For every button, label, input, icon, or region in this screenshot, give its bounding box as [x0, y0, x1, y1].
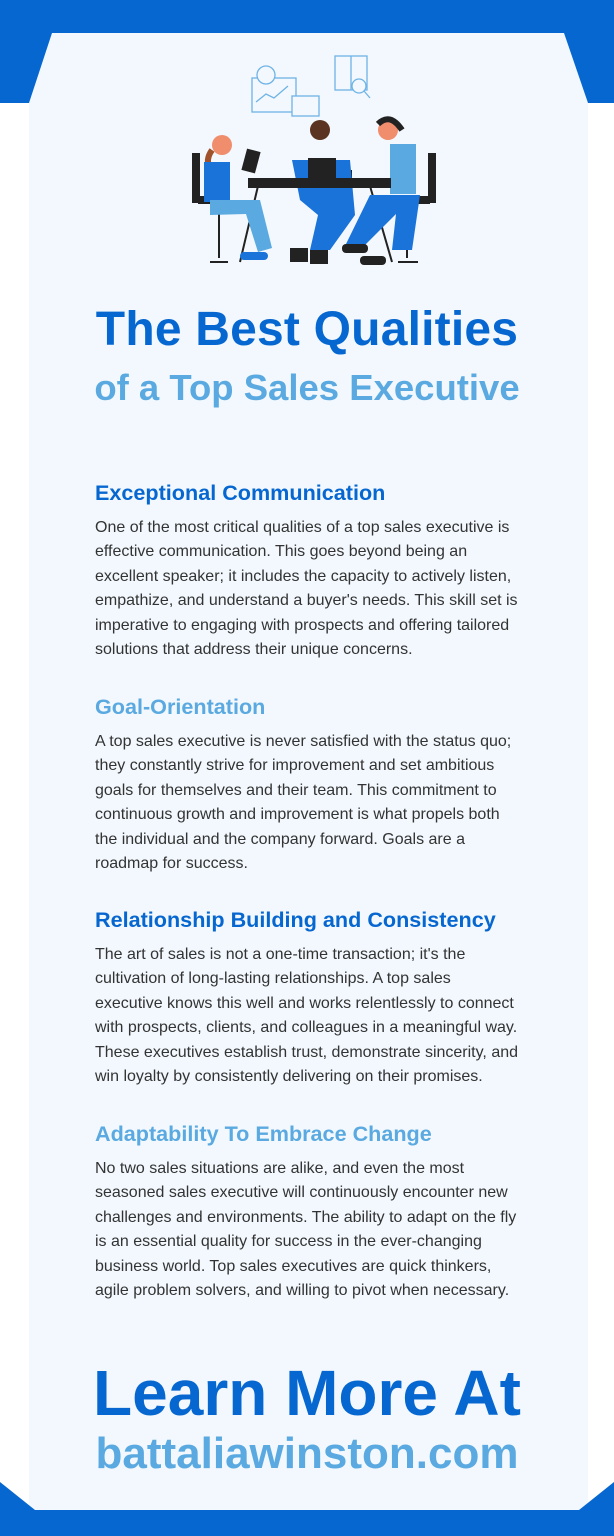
people	[204, 135, 272, 260]
section: Relationship Building: The art of sales is not a one-time transaction; it's the cultivation of long-lasting relationships. A top sales executive knows this well and works relentlessly to connect with prospects, clients, and colleagues in a meaningful way. These executives establish trust, demonstrate sincerity, and win loyalty by consistently delivering on their promises.	[95, 946, 518, 1085]
title	[94, 303, 520, 408]
section: Adaptability: Adaptability To Embrace Change	[95, 1121, 432, 1146]
illustration: sales team meeting	[192, 55, 436, 265]
title: of a Top Sales Executive	[94, 367, 520, 408]
section: Goal-Orientation: A top sales executive is never satisfied with the status quo; they constantly strive for improvement and set ambitious goals for themselves and their team. This commitment to continuous growth and improvement is what propels both the individual and the company forward. Goals are a roadmap for success.	[95, 733, 511, 872]
section: Exceptional Communication: One of the most critical qualities of a top sales executive is effective communication. This goes beyond being an excellent speaker; it includes the capacity to actively listen, empathize, and understand a buyer's needs. This skill set is imperative to engaging with prospects and offering tailored solutions that address their unique concerns.	[95, 519, 518, 658]
section: Exceptional Communication: Exceptional Communication	[95, 480, 385, 505]
footer call to action: Learn More At	[93, 1357, 521, 1429]
footer call to action: battaliawinston.com	[96, 1429, 518, 1478]
footer call to action	[93, 1357, 521, 1478]
section: Goal-Orientation: Goal-Orientation	[95, 694, 265, 719]
table	[248, 178, 391, 188]
icon: chart chat	[252, 56, 370, 116]
title: The Best Qualities	[96, 303, 518, 356]
chairs	[192, 153, 436, 204]
section: Relationship Building: Relationship Building and Consistency	[95, 907, 496, 932]
section: Adaptability: No two sales situations are alike, and even the most seasoned sales executive will continuously encounter new challenges and environments. The ability to adapt on the fly is an essential quality for success in the ever-changing business world. Top sales executives are quick thinkers, agile problem solvers, and willing to pivot when necessary.	[95, 1160, 516, 1299]
